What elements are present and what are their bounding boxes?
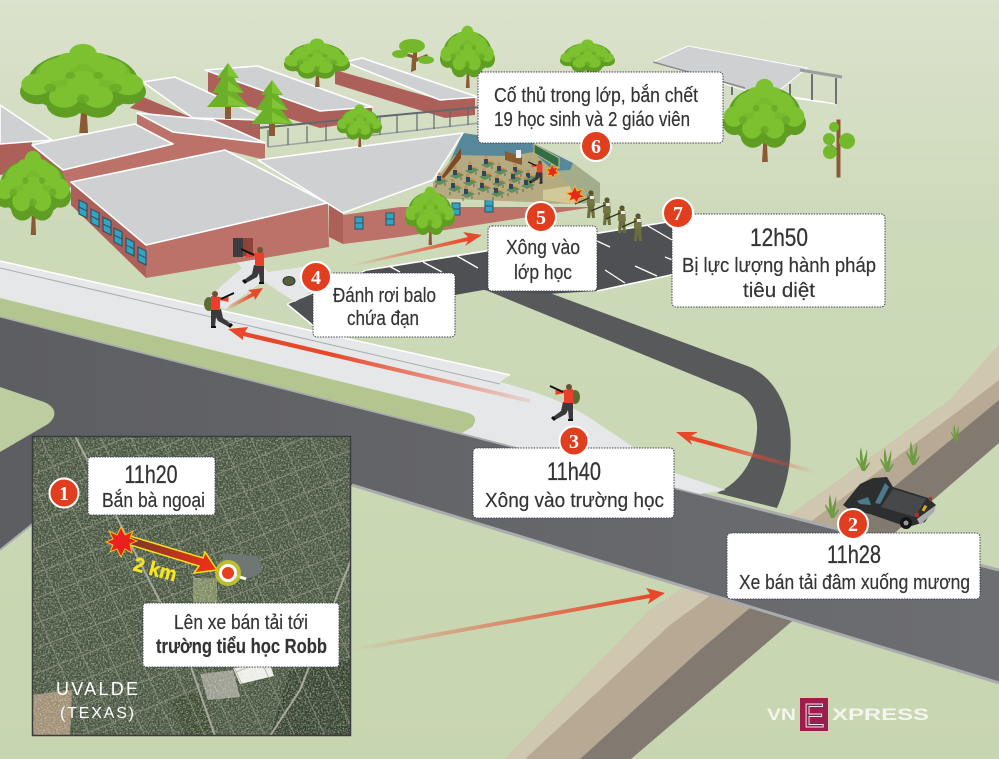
- fence: [0, 107, 480, 170]
- pickup truck: [843, 477, 936, 529]
- arrow: 11h40 to the school path: [228, 327, 530, 403]
- callout 5: lớp học: [514, 262, 572, 284]
- VnExpress logo: E: [804, 697, 824, 734]
- marker 4: [301, 262, 331, 292]
- main road: [0, 316, 999, 683]
- callout: to school: [143, 603, 339, 667]
- students: [434, 155, 537, 201]
- classroom wing: [258, 133, 600, 244]
- marker 1: 1: [59, 483, 69, 505]
- driveway: [483, 289, 791, 508]
- classroom cutaway: [433, 133, 600, 204]
- callout 4: Đánh rơi balo: [333, 285, 436, 307]
- callout 5: [488, 202, 597, 291]
- drainage ditch: [505, 345, 999, 759]
- gunman on sidewalk: [204, 291, 234, 328]
- slim tree: [823, 120, 855, 177]
- callout 6: Cố thủ trong lớp, bắn chết: [494, 84, 698, 107]
- marker 2: [838, 509, 868, 539]
- walkway to door: [202, 257, 325, 309]
- left school wings: [0, 77, 268, 205]
- door: [233, 238, 253, 257]
- marker 1: [50, 478, 78, 508]
- marker 2: 2: [848, 514, 858, 536]
- parking lot: [287, 220, 680, 330]
- callout 7: tiêu diệt: [743, 280, 815, 302]
- VnExpress logo: VN: [767, 705, 796, 724]
- main building: [71, 150, 329, 278]
- state label: (TEXAS): [60, 705, 134, 722]
- windows: [79, 200, 146, 265]
- marker 3: [560, 426, 588, 456]
- callout 3: 11h40: [547, 458, 601, 486]
- VnExpress logo: [767, 697, 929, 734]
- gunman at door: [241, 247, 264, 284]
- marker 5: 5: [536, 207, 546, 229]
- arrow: toward classroom: [350, 232, 482, 267]
- callout 2: [727, 509, 980, 599]
- blast at classroom wall: [566, 186, 585, 203]
- callout 3: Xông vào trường học: [485, 490, 664, 512]
- callout 6: 19 học sinh và 2 giáo viên: [494, 109, 690, 131]
- distance arrow: [127, 536, 217, 573]
- reeds: [825, 424, 961, 518]
- callout 2: 11h28: [827, 541, 881, 569]
- trees: [0, 26, 855, 245]
- grass verge: [0, 298, 475, 433]
- marker 7: [663, 198, 693, 228]
- flat-top tree: [392, 39, 434, 72]
- far school wings: [205, 58, 478, 128]
- callout: 11h20: 11h20: [124, 461, 178, 489]
- marker 6: 6: [591, 136, 601, 158]
- carport: [653, 46, 842, 104]
- gunman at school gate: [550, 384, 580, 421]
- callout 6: [478, 72, 723, 161]
- soldiers: [575, 190, 642, 241]
- callout 7: 12h50: [750, 224, 808, 252]
- callout 7: Bị lực lượng hành pháp: [682, 255, 876, 277]
- sidewalk: [0, 261, 726, 494]
- callout 7: [663, 198, 885, 307]
- callout 4: chứa đạn: [347, 308, 419, 330]
- callout: to school: trường tiểu học Robb: [156, 636, 327, 658]
- city label: UVALDE: [56, 679, 138, 699]
- marker 6: [581, 131, 611, 161]
- grass island: [0, 387, 54, 452]
- marker 4: 4: [311, 267, 321, 289]
- callout 4: [301, 262, 455, 337]
- distance label: 2 km: [131, 554, 179, 586]
- VnExpress logo: XPRESS: [832, 705, 929, 724]
- marker 7: 7: [673, 203, 683, 225]
- callout: 11h20: Bắn bà ngoại: [102, 489, 205, 512]
- muzzle flash: [546, 164, 559, 178]
- school marker: [215, 560, 246, 586]
- arrow: ditch to school: [676, 432, 815, 474]
- dropped backpack: [283, 276, 295, 286]
- marker 3: 3: [569, 431, 579, 453]
- callout 5: Xông vào: [506, 237, 580, 259]
- arrow: map to road: [352, 588, 665, 652]
- arrow: path to door: [228, 288, 263, 309]
- shooter in classroom: [528, 161, 542, 184]
- callout: to school: Lên xe bán tải tới: [174, 612, 308, 634]
- callout 3: [473, 426, 674, 518]
- gunmen: [204, 247, 580, 421]
- callout 2: Xe bán tải đâm xuống mương: [739, 572, 970, 594]
- map inset: [32, 436, 351, 736]
- explosion mark: [106, 527, 137, 557]
- callout: 11h20: [88, 457, 215, 515]
